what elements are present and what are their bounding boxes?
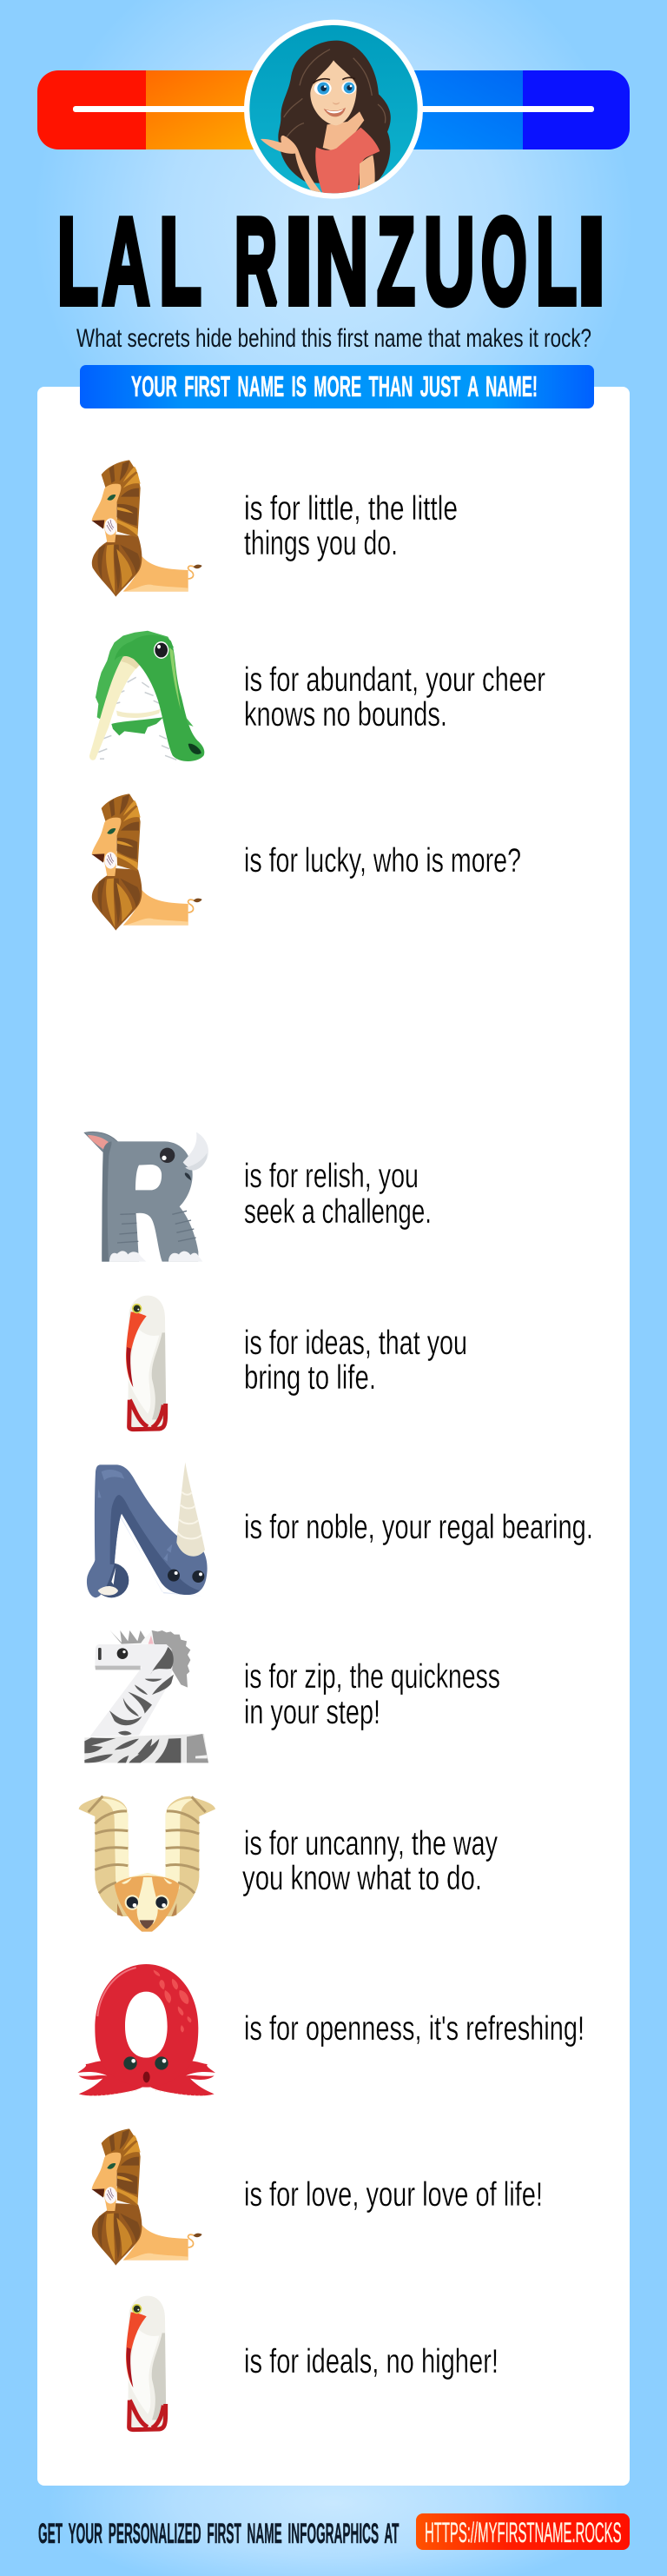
icon: lion letter L (92, 793, 202, 931)
row 9: letter O (77, 1964, 584, 2095)
banner (80, 365, 594, 408)
text: seek a challenge. (244, 1193, 432, 1231)
icon: stork letter I (126, 1296, 166, 1430)
title: I (577, 193, 606, 330)
row 10: letter L (92, 2128, 543, 2266)
white content panel (37, 387, 630, 2486)
text (244, 490, 458, 562)
title: O (481, 193, 527, 330)
text: bring to life. (244, 1359, 376, 1397)
icon: lion letter L (92, 2128, 202, 2266)
text: is for relish, you (244, 1158, 419, 1195)
header gradient bar (37, 70, 630, 149)
text: you know what to do. (242, 1860, 482, 1897)
title: A (102, 193, 149, 330)
row 7: letter Z (84, 1630, 500, 1763)
icon: stork letter I (126, 2296, 166, 2430)
icon: lion letter L (92, 460, 202, 597)
text (244, 1158, 432, 1231)
icon: alligator letter A (89, 631, 204, 761)
white line across bar (73, 106, 594, 112)
row 4: letter R (84, 1132, 432, 1262)
title: L (57, 193, 98, 330)
text: things you do. (244, 525, 398, 562)
text: in your step! (244, 1694, 380, 1731)
text: is for love, your love of life! (244, 2176, 543, 2214)
icon: rhino letter R (84, 1132, 208, 1262)
text (242, 1825, 498, 1897)
text (244, 661, 545, 734)
row 5: letter I (126, 1296, 467, 1430)
row 8: letter U (79, 1796, 498, 1932)
text: is for little, the little (244, 490, 458, 528)
title: U (424, 193, 475, 330)
text: is for ideas, that you (244, 1325, 467, 1362)
row 1: letter L (92, 460, 458, 597)
text: is for zip, the quickness (244, 1658, 500, 1696)
text: knows no bounds. (244, 696, 447, 734)
icon: narwhal letter N (87, 1463, 208, 1597)
title: L (159, 193, 201, 330)
icon: zebra letter Z (84, 1630, 208, 1763)
icon: ringed animal letter U (79, 1796, 215, 1932)
icon: octopus letter O (77, 1964, 215, 2095)
text: is for abundant, your cheer (244, 661, 545, 699)
text (244, 1325, 467, 1397)
row 6: letter N (87, 1463, 593, 1597)
title: R (234, 193, 277, 330)
title: N (314, 193, 368, 330)
text: is for uncanny, the way (244, 1825, 498, 1862)
row 3: letter L (92, 793, 521, 931)
text (244, 1658, 500, 1731)
text: is for ideals, no higher! (244, 2343, 499, 2380)
title: Z (377, 193, 415, 330)
text: is for lucky, who is more? (244, 842, 521, 880)
title: I (284, 193, 314, 330)
title: L (536, 193, 577, 330)
row 11: letter I (126, 2296, 499, 2430)
avatar: cartoon woman in circle (244, 20, 423, 199)
row 2: letter A (89, 631, 545, 761)
